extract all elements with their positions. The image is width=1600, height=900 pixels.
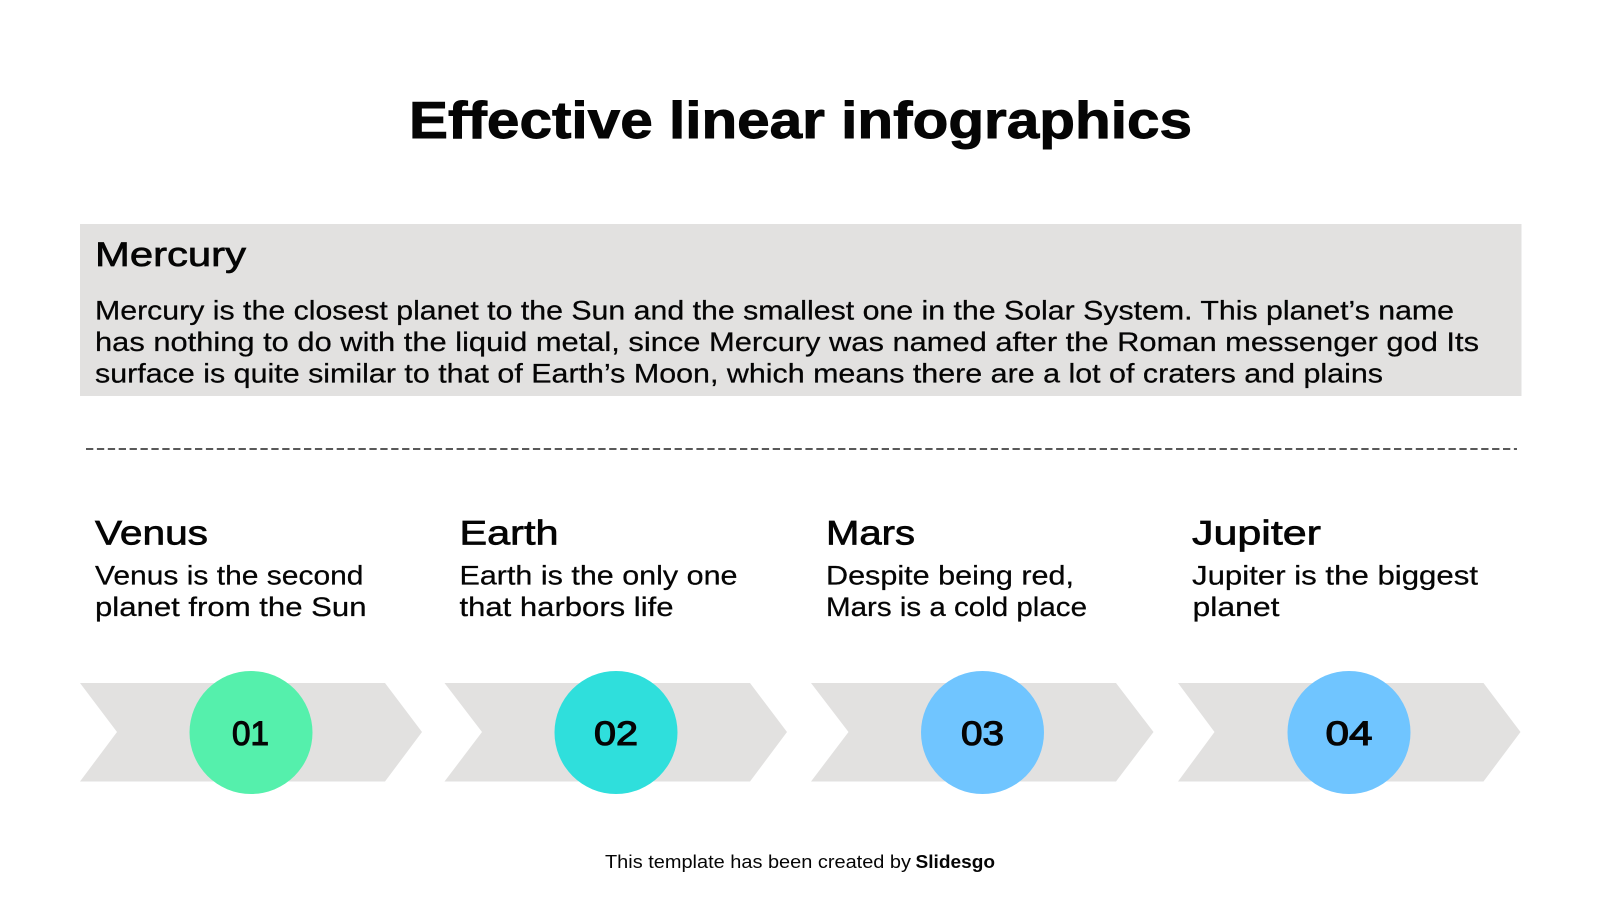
number 02: 02 [594,715,638,753]
text block: Mars description [826,560,1087,622]
text block: Jupiter description [1192,560,1479,622]
footer credit: This template has been created by [605,852,911,872]
number 03: 03 [961,715,1004,753]
text block: Earth description: that harbors life [460,592,674,622]
panel: step 1 Venus [80,514,422,794]
panel: step 2 Earth [444,514,787,794]
text block: Mars description: Despite being red, [826,560,1074,590]
icon: circle 01 [190,671,312,794]
text block: Mercury description: Mercury is the closest planet to the Sun and the smallest one in the Solar System. This planet’s name [95,296,1454,326]
heading: Mars: Mars [826,514,915,552]
heading: Mercury: Mercury [95,236,246,274]
footer credit: Slidesgo [916,852,995,872]
heading: Jupiter: Jupiter [1192,514,1321,552]
text block: Venus description: Venus is the second [95,560,364,590]
text block: Earth description [460,560,738,622]
number 04: 04 [1326,715,1372,753]
panel: step 3 Mars [811,514,1154,794]
arrow: chevron 1 [80,683,422,782]
heading: Earth: Earth [460,514,558,552]
panel: Mercury [80,224,1522,396]
text block: Mercury description: has nothing to do with the liquid metal, since Mercury was named after the Roman messenger god Its [95,327,1479,357]
text block: Earth description: Earth is the only one [460,560,738,590]
text block: Jupiter description: Jupiter is the biggest [1192,560,1479,590]
text block: Venus description: planet from the Sun [95,592,366,622]
arrow: chevron 4 [1178,683,1520,782]
text block: Venus description [95,560,366,622]
icon: circle 03 [921,671,1044,794]
title: Effective linear infographics [409,91,1192,149]
text block: Mars description: Mars is a cold place [826,592,1087,622]
arrow: chevron 3 [811,683,1154,782]
number 01: 01 [232,715,269,753]
text block: Mercury description: surface is quite similar to that of Earth’s Moon, which means there are a lot of craters and plains [95,358,1383,388]
icon: circle 02 [554,671,678,794]
arrow: chevron 2 [444,683,787,782]
icon: circle 04 [1288,671,1410,794]
panel: step 4 Jupiter [1178,514,1520,794]
text block: Jupiter description: planet [1192,592,1280,622]
text block: Mercury description [95,296,1479,388]
heading: Venus: Venus [95,514,208,552]
